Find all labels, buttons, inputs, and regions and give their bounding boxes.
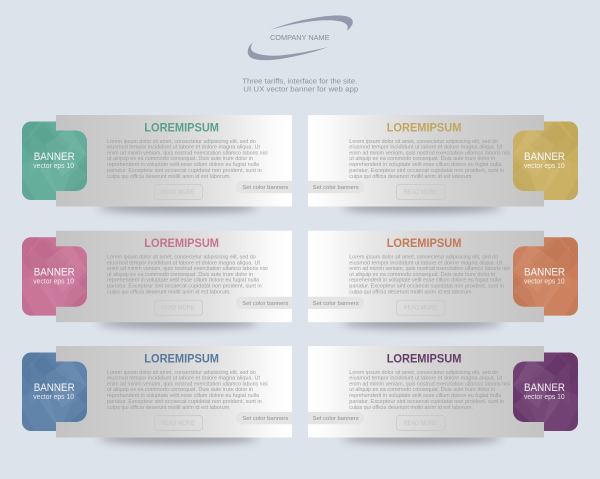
logo: company name [248, 15, 353, 60]
body text: culpa qui officia deserunt mollit anim id est laborum. [349, 174, 473, 180]
badge: yellow [513, 121, 578, 201]
body text: enim ad minim veniam, quis nostrud exercitation ullamco laboris nisi [349, 266, 510, 272]
body text [349, 139, 510, 180]
card background [308, 231, 544, 322]
card background [56, 231, 292, 322]
set color pill [308, 297, 364, 309]
subtitle: Three tariffs, interface for the site. [242, 76, 357, 85]
body text: pariatur. Excepteur sint occaecat cupidatat non proident, sunt in [107, 168, 262, 174]
body text: Lorem ipsum dolor sit amet, consectetur adipisicing elit, sed do [107, 254, 256, 260]
body text [349, 370, 510, 411]
read more button: READ MORE [161, 305, 194, 312]
body text: reprehenderit in voluptate velit esse cillum dolore eu fugiat nulla [349, 162, 502, 168]
panel: purple banner [308, 346, 578, 444]
body text: enim ad minim veniam, quis nostrud exercitation ullamco laboris nisi [107, 381, 268, 387]
badge: orange: BANNER [524, 267, 565, 279]
read more button: READ MORE [404, 189, 437, 196]
body text [107, 370, 268, 411]
badge: orange [513, 237, 578, 317]
body text: enim ad minim veniam, quis nostrud exercitation ullamco laboris nisi [107, 266, 268, 272]
logo swoosh upper [270, 15, 353, 30]
set color pill: Set color banners [242, 185, 288, 191]
badge: green: vector eps 10 [33, 163, 74, 170]
body text: reprehenderit in voluptate velit esse cillum dolore eu fugiat nulla [107, 393, 260, 399]
body text: culpa qui officia deserunt mollit anim id est laborum. [107, 405, 231, 411]
body text: culpa qui officia deserunt mollit anim id est laborum. [107, 174, 231, 180]
body text: eiusmod tempor incididunt ut labore et dolore magna aliqua. Ut [107, 376, 260, 382]
body text: culpa qui officia deserunt mollit anim id est laborum. [349, 405, 473, 411]
body text: pariatur. Excepteur sint occaecat cupidatat non proident, sunt in [349, 284, 504, 290]
body text: Lorem ipsum dolor sit amet, consectetur adipisicing elit, sed do [107, 139, 256, 145]
heading: LOREMIPSUM [144, 352, 219, 366]
panel: green banner [22, 115, 292, 213]
company name: COMPANY NAME [270, 33, 330, 42]
set color pill [236, 412, 292, 424]
panel: orange banner [308, 231, 578, 329]
set color pill: Set color banners [313, 301, 359, 307]
badge: purple [513, 352, 578, 432]
card background [56, 346, 292, 438]
read more button: READ MORE [161, 189, 194, 196]
read more button [154, 300, 202, 315]
read more button [154, 416, 202, 430]
badge: green: BANNER [34, 151, 75, 163]
body text: pariatur. Excepteur sint occaecat cupidatat non proident, sunt in [349, 168, 504, 174]
body text: reprehenderit in voluptate velit esse cillum dolore eu fugiat nulla [349, 393, 502, 399]
badge: pink: BANNER [34, 267, 75, 279]
badge: purple: BANNER [524, 382, 565, 394]
set color pill [236, 181, 292, 193]
heading: LOREMIPSUM [144, 236, 219, 250]
card background [308, 115, 544, 206]
badge: yellow: BANNER [524, 151, 565, 163]
body text [107, 254, 268, 296]
body text: pariatur. Excepteur sint occaecat cupidatat non proident, sunt in [107, 284, 262, 290]
heading: LOREMIPSUM [387, 120, 461, 134]
set color pill [308, 181, 364, 193]
badge: yellow: vector eps 10 [524, 163, 565, 170]
read more button [154, 184, 202, 200]
badge: pink: vector eps 10 [33, 279, 74, 286]
body text: ut aliquip ex ea commodo consequat. Duis aute irure dolor in [107, 272, 253, 278]
set color pill [308, 412, 364, 424]
body text: enim ad minim veniam, quis nostrud exercitation ullamco laboris nisi [349, 381, 510, 387]
body text: reprehenderit in voluptate velit esse cillum dolore eu fugiat nulla [349, 278, 502, 284]
read more button: READ MORE [404, 420, 437, 427]
body text [107, 139, 268, 180]
subtitle: UI UX vector banner for web app [243, 85, 358, 94]
panel: blue banner [22, 346, 292, 444]
card background [308, 346, 544, 438]
badge: orange: vector eps 10 [524, 279, 565, 286]
badge: purple: vector eps 10 [524, 394, 565, 401]
body text: culpa qui officia deserunt mollit anim id est laborum. [107, 289, 231, 296]
subtitle [242, 76, 358, 94]
body text: Lorem ipsum dolor sit amet, consectetur adipisicing elit, sed do [349, 139, 498, 145]
read more button [396, 184, 445, 200]
body text: eiusmod tempor incididunt ut labore et dolore magna aliqua. Ut [349, 376, 503, 382]
badge: green [22, 121, 87, 201]
heading: LOREMIPSUM [144, 120, 219, 134]
read more button: READ MORE [161, 420, 194, 427]
body text: ut aliquip ex ea commodo consequat. Duis aute irure dolor in [349, 387, 495, 393]
set color pill: Set color banners [313, 416, 359, 422]
body text: ut aliquip ex ea commodo consequat. Duis aute irure dolor in [349, 156, 495, 162]
set color pill: Set color banners [313, 185, 359, 191]
badge: blue: BANNER [34, 382, 75, 394]
body text: enim ad minim veniam, quis nostrud exercitation ullamco laboris nisi [349, 150, 510, 156]
body text: enim ad minim veniam, quis nostrud exercitation ullamco laboris nisi [107, 150, 268, 156]
panel: yellow banner [308, 115, 578, 213]
body text [349, 254, 510, 296]
body text: eiusmod tempor incididunt ut labore et dolore magna aliqua. Ut [107, 260, 260, 266]
badge: pink [22, 237, 87, 317]
body text: ut aliquip ex ea commodo consequat. Duis aute irure dolor in [349, 272, 495, 278]
set color pill: Set color banners [242, 416, 288, 422]
card background [56, 115, 292, 206]
body text: Lorem ipsum dolor sit amet, consectetur adipisicing elit, sed do [349, 370, 498, 376]
set color pill [236, 297, 292, 309]
heading: LOREMIPSUM [387, 352, 461, 366]
body text: ut aliquip ex ea commodo consequat. Duis aute irure dolor in [107, 156, 253, 162]
body text: eiusmod tempor incididunt ut labore et dolore magna aliqua. Ut [349, 145, 503, 151]
body text: Lorem ipsum dolor sit amet, consectetur adipisicing elit, sed do [349, 254, 498, 260]
panel: pink banner [22, 231, 292, 329]
body text: eiusmod tempor incididunt ut labore et dolore magna aliqua. Ut [107, 145, 260, 151]
body text: eiusmod tempor incididunt ut labore et dolore magna aliqua. Ut [349, 260, 503, 266]
body text: reprehenderit in voluptate velit esse cillum dolore eu fugiat nulla [107, 278, 260, 284]
body text: reprehenderit in voluptate velit esse cillum dolore eu fugiat nulla [107, 162, 260, 168]
read more button [396, 416, 445, 430]
heading: LOREMIPSUM [387, 236, 461, 250]
read more button: READ MORE [404, 305, 437, 312]
set color pill: Set color banners [242, 301, 288, 307]
badge: blue: vector eps 10 [33, 394, 74, 401]
read more button [396, 300, 445, 315]
body text: ut aliquip ex ea commodo consequat. Duis aute irure dolor in [107, 387, 253, 393]
body text: Lorem ipsum dolor sit amet, consectetur adipisicing elit, sed do [107, 370, 256, 376]
badge: blue [22, 352, 87, 432]
body text: culpa qui officia deserunt mollit anim id est laborum. [349, 289, 473, 296]
logo swoosh lower [248, 41, 328, 60]
body text: pariatur. Excepteur sint occaecat cupidatat non proident, sunt in [107, 399, 262, 405]
body text: pariatur. Excepteur sint occaecat cupidatat non proident, sunt in [349, 399, 504, 405]
